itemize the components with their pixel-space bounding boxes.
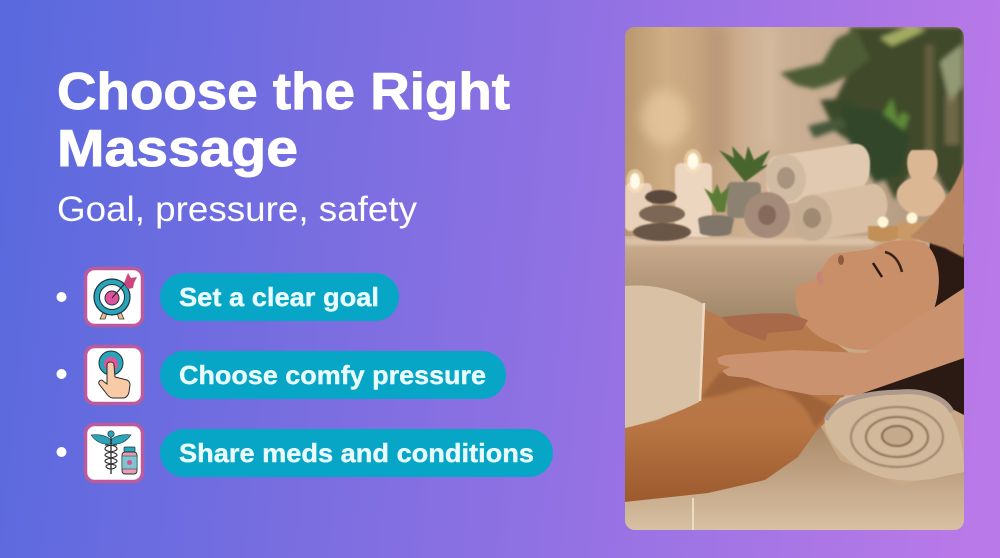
title: Choose the Right	[57, 63, 510, 121]
bullet	[56, 447, 66, 457]
therapist arm and lower hand	[717, 288, 964, 395]
list item: share meds and conditions	[56, 424, 553, 482]
rolled towels	[744, 144, 887, 241]
icon: finger pressing button	[86, 346, 142, 404]
blurred plant	[780, 26, 964, 205]
pill label: Set a clear goal	[179, 282, 379, 312]
title	[57, 63, 510, 178]
pill label	[160, 273, 399, 321]
client face	[795, 240, 939, 350]
title: Massage	[57, 120, 298, 178]
table with beige cloth	[625, 236, 964, 326]
pill label	[160, 351, 506, 399]
potted plants	[698, 146, 770, 236]
candles	[625, 149, 712, 237]
blurred curtain backdrop	[625, 27, 964, 252]
pill label: Choose comfy pressure	[179, 360, 486, 390]
therapist upper hand	[722, 313, 808, 341]
icon: caduceus and medicine bottle	[86, 424, 142, 482]
list item: set a clear goal	[56, 268, 399, 326]
pill label: Share meds and conditions	[179, 438, 534, 468]
bullet	[56, 292, 66, 302]
clay vase and tea lights	[868, 150, 945, 244]
client hair	[860, 239, 964, 415]
therapist second arm at top right	[910, 162, 964, 258]
list item: choose comfy pressure	[56, 346, 506, 404]
client body: neck, chest and arm	[625, 310, 860, 502]
bullet	[56, 369, 66, 379]
stacked stones	[633, 190, 691, 241]
head rest towel roll	[825, 391, 964, 481]
chest towel	[625, 285, 705, 428]
icon: target with arrow	[86, 268, 142, 326]
pill label	[160, 429, 553, 477]
massage table sheet	[625, 425, 964, 530]
subtitle: Goal, pressure, safety	[57, 190, 418, 229]
photo: spa massage scene	[625, 26, 964, 530]
